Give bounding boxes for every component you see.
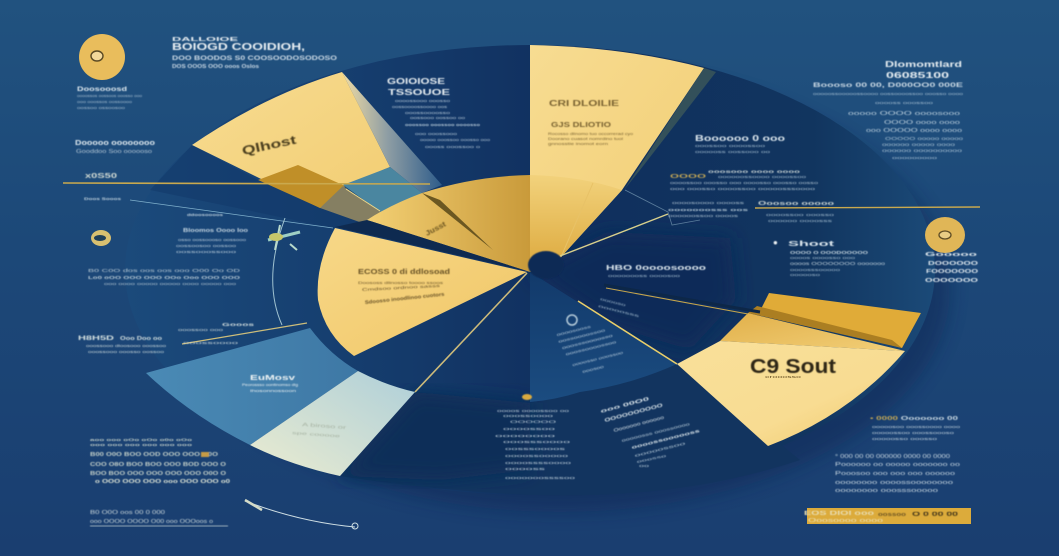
text block: left inner notes: oossoosoo oossoo [176, 243, 237, 248]
text block: centre right: ooosooo oooo oooo [708, 169, 801, 174]
text block: centre right: oooooossoo oooos [668, 213, 738, 218]
text block: upper centre-left: ooossoo ooossoo oooosso [405, 123, 480, 127]
text block: centre right: oooooossoooo oooossoo [718, 175, 806, 179]
label: gold wedge text: CRI DLOILIE [549, 99, 620, 108]
text block: bottom centre column: ooosssoooo [503, 439, 572, 444]
text block: upper centre-left: GOIOIOSE [387, 77, 446, 86]
panel: lower-right gold wedge [677, 293, 921, 446]
table: upper left data: ooo oooo ooooo ooooo oooo ooooo ooo [104, 282, 236, 286]
text block: upper right header: OOOOO ooooo ooooo [885, 136, 964, 141]
text block: far right notes: Gooooo [925, 252, 977, 258]
text block: centre dark sector: ooooosss [598, 304, 640, 318]
callout: gold bar: Ooosoooo oooo [808, 518, 883, 524]
text block: left inner notes: osso oossoooso oossooo [178, 237, 247, 242]
label: pale wedge text [292, 422, 347, 438]
text block: upper right header: ooooss ooossoo [875, 101, 933, 105]
callout: gold bar: oossoo [878, 512, 906, 518]
text block: centre right: ooossoo oooossoo [695, 143, 767, 148]
text block: lighter wedge: oossoooossoo [558, 328, 606, 344]
heading: title block: DALLOIOE [172, 37, 240, 43]
text block: bottom centre angled: OOOOOOOOOO [604, 403, 664, 424]
callout: gold bar: EOS DIOI ooo [804, 511, 875, 517]
text block: centre right: Boooooo 0 ooo [695, 134, 785, 143]
text block: left inner notes: Doos Sooos [84, 196, 122, 201]
table: bottom left data: aoo ooo oOo oOo o0o oOo [90, 437, 193, 442]
text block: left inner notes [84, 196, 248, 254]
text block: lower right notes: Pooosoo ooo ooo ooo oooooo [835, 471, 955, 477]
text block: bottom centre column: oooossooooo [505, 453, 570, 458]
text block: lower right notes [835, 416, 961, 494]
text block: centre right: oooosoooo ooooss [672, 200, 744, 205]
text block: lighter wedge [556, 315, 626, 378]
label: gold wedge text: gnnosstie inomot eorn [548, 141, 608, 146]
text block: left notes: x0S50 [85, 173, 117, 180]
text block: upper right header: ooooooooo [892, 155, 939, 160]
text block: upper centre-left: TSSOUOE [388, 88, 451, 97]
text block: lower right notes: Poooooo oo ooooo ooooooo oo [835, 462, 960, 468]
text block: upper centre-left: oossoooossoooo oos [392, 105, 447, 109]
text block: upper centre-left: ooossoooosso [405, 111, 450, 115]
text block: centre right: oooooo oooosss [768, 218, 832, 223]
text block: left notes: Doosooosd [77, 87, 128, 93]
text block: lower left notes: Gooos [222, 322, 255, 327]
label: gold wedge text: Rocosso dlinomo tuo occorrerad cyo [548, 131, 634, 136]
text block: centre right: oooossoo ooosso ooo oooosso ooosso oosso [670, 180, 819, 185]
text block: left notes: Dooooo oooooooo [75, 140, 155, 147]
label: wedge title: C9 Sout [750, 356, 836, 378]
panel: left gold wedge [318, 220, 527, 356]
text block: bottom left caption: ooo OOOO OOOO O00 ooo OOOoos o [90, 519, 213, 525]
text block: lower right notes: ooooosoo ooossoooo oooo [872, 424, 961, 429]
table: upper left data: Lo0 oOO OOO OOO OOo Ooo OOO OOO [88, 275, 241, 280]
text block: upper right header: Dlomomtlard [885, 60, 962, 69]
text block: bottom centre column [495, 394, 577, 480]
text block: bottom centre column: ooooss [505, 466, 545, 471]
text block: lower left notes: ooossooo ooosso oossoo [88, 350, 164, 354]
label: left wedge text [358, 269, 450, 306]
label: left wedge text: Sdoosso inoodlinoo cuotors [365, 292, 445, 306]
text block: bottom centre column: oooossoo [503, 426, 557, 431]
text block: lower left notes [78, 322, 255, 354]
text block: shoot list [773, 238, 886, 277]
heading: title block: DOS OOOS OOO ooos Oslos [172, 64, 259, 70]
heading: title block [172, 37, 337, 70]
text block: upper right header: 06085100 [886, 71, 950, 80]
text block: lighter wedge: oooosooss [556, 325, 591, 337]
text block: upper right header: oooooo ooooo oooo [882, 142, 956, 147]
text block: centre right: oooooss oossooo oo [695, 149, 772, 154]
text block: shoot list: OOOO O OOODOOOOO [790, 250, 869, 255]
text block: left notes: oossoo ossoosoo [77, 106, 125, 110]
text block: upper right header: ooooossooooossoooo oossoooossoo ooosso oooo [813, 92, 963, 96]
text block: left notes: oooossos oossoos ooosso ooo [77, 94, 142, 98]
icon: right badge [925, 217, 965, 253]
text block: left notes: ooo ooossos oossoooo [77, 100, 132, 104]
text block: shoot list: oooosssooooo [790, 268, 840, 272]
text block: far right notes: OOOOOOO [925, 278, 978, 284]
text block: lower right notes: oooooooo oooossoooooooo [835, 480, 953, 486]
text block: lower right notes: • 0000 Ooooooo 00 [870, 416, 958, 422]
label: left wedge text: Doososs dlinosso toooo ssoos [358, 280, 443, 285]
table: bottom left data: BOO BOO OOO OOO OOO OOO O0O O [90, 471, 226, 477]
text block: upper right header [813, 60, 964, 160]
text block: centre right: ooooooosss oos [668, 207, 750, 212]
text block: centre dark sector: HBO 0oooosoooo [606, 265, 706, 272]
label: wedge subtitle: crooosso [765, 374, 803, 379]
label: wedge title: Qlhost [241, 133, 297, 158]
text block: upper right header: ooooo OOOO oooosooo [848, 111, 960, 117]
text block: shoot list: ● [773, 238, 778, 247]
table: upper left data: B0 C0O dos oos oos ooo O00 Oo OD [88, 268, 242, 273]
text block: bottom centre column: OOOOOO [510, 419, 556, 424]
icon: left badge [91, 230, 111, 246]
panel: centre gold wedge [367, 175, 530, 272]
text block: upper right header: Boooso 00 00, D000OO0 000E [813, 83, 963, 89]
text block: shoot list: Shoot [788, 241, 836, 248]
panel: circular disc [125, 45, 950, 512]
text block: lower left notes: ooossoooo [183, 341, 238, 345]
text block: left inner notes: Bloomos Oooo Ioo [183, 228, 248, 234]
label: centre wedge caption: Jusst [425, 221, 448, 238]
heading: title block: DOO BOODOS S0 COOSOODOSODOSO [172, 56, 337, 62]
text block: lower left notes: Ooo Doo oo [120, 336, 162, 342]
text block: lower right notes: ooooossoo ooossoooso [872, 430, 955, 435]
text block: upper right header: ooo OOOOO oooo oooo [866, 128, 962, 134]
table: bottom left data [90, 437, 230, 485]
text block: lighter wedge: oooosso ooossoo [572, 351, 623, 367]
text block: bottom centre angled: ooosso [636, 454, 667, 464]
text block: centre right: OOOO [670, 174, 706, 180]
text block: centre right: ooo ooosso oooossoo ooooosssoooo [670, 186, 817, 191]
text block: bottom centre angled: oo [639, 464, 649, 468]
label: left wedge text: ECOSS 0 di ddlosoad [358, 269, 450, 276]
text block: bottom centre column: oooossssoooo [505, 460, 573, 465]
text block: upper centre-left: oossooo oossoo oo [410, 116, 465, 120]
label: blue wedge text: EuMosv [250, 375, 295, 382]
label: pale wedge text: A biroso or [302, 422, 347, 431]
label: left wedge text: Cmdsoo ordnoo sasss [362, 283, 440, 292]
text block: upper centre-left [387, 77, 490, 149]
icon: centre hub [528, 251, 564, 279]
text block: upper centre-left: ooooo ooossoo ooosso ooo [420, 138, 490, 142]
text block: centre right: oooossoo ooosso [766, 212, 836, 217]
text block: bottom centre angled: ooooossoo [634, 440, 688, 458]
text block: bottom centre angled: ooooosss ooossoooo [621, 421, 692, 443]
label: blue wedge text [242, 375, 298, 393]
text block: bottom left caption: B0 O0O oos 00 0 000 [90, 510, 165, 516]
text block: centre dark sector [598, 265, 706, 318]
text block: upper centre-left: oooossooo ooosso [395, 99, 450, 103]
text block: bottom centre angled: Ooooooo oooooo [613, 414, 665, 433]
text block: upper right header: oooooo oooooooooo [882, 148, 963, 153]
gold connector lines [63, 183, 980, 529]
text block: lower left notes: ooossooo dloosooo ooossoo [86, 343, 167, 348]
text block: far right notes: FOOOOOOO [926, 269, 978, 275]
text block: centre dark sector: oooooooss oooosoo [608, 274, 680, 278]
text block: bottom centre column: oooos oooossoo oo [497, 408, 571, 413]
text block: shoot list: oooos oooosso ooo [790, 256, 855, 260]
text block: left inner notes: ddoosoooos [187, 212, 224, 217]
text block: bottom centre angled: ooo 00O0 [600, 396, 650, 415]
label: gold wedge text: Doorano cuasot nomrdino tuol [548, 136, 623, 141]
text block: bottom centre angled: oooossoooooss [631, 428, 701, 450]
text block: centre right [668, 134, 836, 223]
callout: gold bar [804, 508, 971, 524]
label: blue wedge text: Ihosonnossoon [250, 388, 296, 393]
text block: lower right notes: ° 000 00 00 000000 0000 00 0000 [835, 454, 950, 460]
text block: left notes [75, 87, 155, 180]
label: blue wedge text: Peorossso oontinomso dlg [242, 382, 298, 387]
label: gold wedge text [548, 99, 634, 146]
callout: gold bar: O 0 00 00 [912, 512, 959, 518]
text block: shoot list: oooooso [790, 273, 820, 277]
text block: lower left notes: ooossoo ooo [178, 327, 224, 332]
panel: medium blue wedge [146, 328, 358, 445]
panel: upper-left gold wedge [150, 72, 442, 228]
table: bottom left data: B00 O0O BOO OOD OOO OOO O0O [90, 452, 218, 458]
text block: lighter wedge: ooossoooossoo [565, 340, 617, 356]
text block: bottom centre column: ooooooossssoo [505, 475, 577, 480]
text block: lower left notes: H8H5D [78, 336, 115, 342]
text block: left inner notes: oossooossooo [176, 249, 238, 254]
panel: pale blue wedge [250, 371, 415, 476]
icon: satellite marker [268, 225, 300, 250]
text block: left notes: Gooddoo Soo oooooso [76, 149, 152, 155]
text block: upper centre-left: oooss ooossoo o [425, 145, 480, 149]
text block: bottom centre column: oosssoooos [505, 446, 565, 451]
text block: shoot list: oooos OOOOOOOO ooooooo [790, 261, 886, 266]
text block: centre dark sector: ooooso [600, 297, 626, 307]
text block: lighter wedge: ooosssoooosso [562, 334, 613, 350]
text block: bottom centre column: oooooooo [495, 433, 558, 438]
text block: centre right: Ooosoo ooooo [758, 201, 834, 207]
text block: lower right notes: ooooosso ooosso [872, 436, 939, 441]
text block: upper centre-left: ooo ooossooo [415, 132, 457, 136]
table: bottom left data: ooo ooo ooo ooo ooo ooo [90, 442, 193, 447]
text block: lower right notes: oooooooo ooosssooooo [835, 488, 938, 494]
table: bottom left data: o OOO OOO OOO ooo OOO OOO o0 [95, 479, 230, 485]
text block: bottom centre column: ooossoooo [503, 413, 555, 418]
text block: bottom left caption [90, 510, 228, 526]
label: pale wedge text: spe cooooe [292, 430, 342, 438]
text block: far right notes [925, 252, 978, 284]
heading: title block: BOIOGD COOIDIOH, [172, 42, 305, 53]
text block: upper right header: OOOO oooo oooo [884, 120, 960, 126]
label: gold wedge text: GJS DLIOTIO [551, 122, 612, 129]
table: upper left data [88, 268, 242, 286]
text block: bottom centre angled [600, 396, 701, 468]
panel: top gold wedge [530, 45, 716, 272]
table: bottom left data: COO O8O BOO BOO OOO BOD OOO O [90, 462, 226, 468]
text block: lighter wedge: ooosoo [582, 365, 604, 374]
text block: far right notes: DOOOOOO [928, 261, 978, 267]
icon: top-left badge [79, 34, 125, 80]
